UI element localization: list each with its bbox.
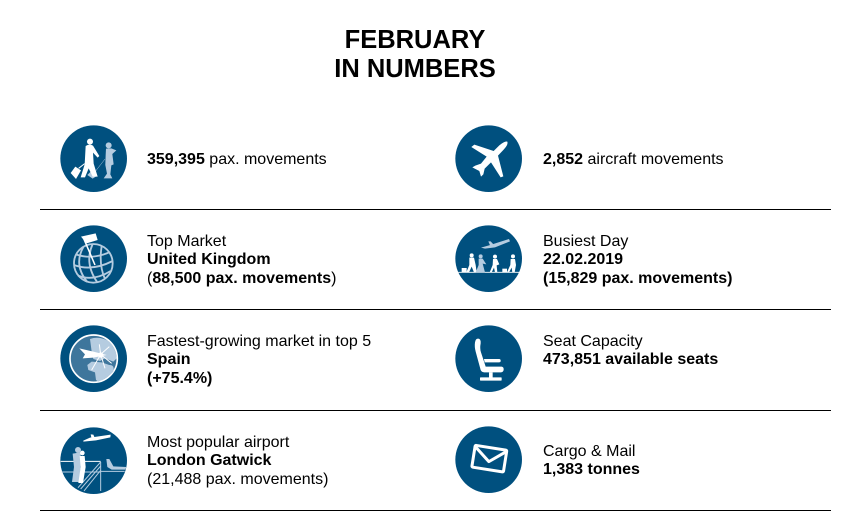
- text: busiest day: (15,829 pax. movements): [543, 270, 732, 287]
- text: fastest-growing market: [147, 333, 371, 387]
- text: most popular airport: Most popular airport: [147, 434, 289, 451]
- icon: envelope: [455, 426, 522, 493]
- icon: map of Europe with plane: [60, 325, 127, 392]
- icon: airplane: [455, 125, 522, 192]
- text: top market: [147, 233, 336, 287]
- text: most popular airport: London Gatwick: [147, 452, 271, 469]
- text: seat capacity: 473,851 available seats: [543, 351, 718, 368]
- text: fastest-growing market: (+75.4%): [147, 370, 212, 387]
- text: seat capacity: [543, 333, 718, 368]
- text: busiest day: Busiest Day: [543, 233, 628, 250]
- text: seat capacity: Seat Capacity: [543, 333, 643, 350]
- text: top market: United Kingdom: [147, 251, 271, 268]
- text: aircraft movements: 2,852 aircraft movements: [543, 151, 724, 168]
- text: top market: Top Market: [147, 233, 226, 250]
- text: most popular airport: [147, 434, 328, 488]
- icon: globe with flag: [60, 225, 127, 292]
- title: [334, 26, 496, 83]
- text: passenger movements: 359,395 pax. movements: [147, 151, 327, 168]
- text: cargo and mail: Cargo & Mail: [543, 443, 635, 460]
- text: busiest day: 22.02.2019: [543, 251, 623, 268]
- text: fastest-growing market: Spain: [147, 351, 191, 368]
- text: cargo and mail: 1,383 tonnes: [543, 461, 640, 478]
- text: top market: (88,500 pax. movements): [147, 270, 336, 287]
- icon: passengers and departing plane: [455, 225, 522, 292]
- icon: observers watching aircraft: [60, 427, 127, 494]
- icon: passengers walking: [60, 125, 127, 192]
- text: cargo and mail: [543, 443, 640, 478]
- text: fastest-growing market: Fastest-growing market in top 5: [147, 333, 371, 350]
- text: busiest day: [543, 233, 732, 287]
- title: FEBRUARY: [345, 26, 485, 54]
- icon: airline seat: [455, 325, 522, 392]
- title: IN NUMBERS: [334, 55, 496, 83]
- text: most popular airport: (21,488 pax. movements): [147, 471, 328, 488]
